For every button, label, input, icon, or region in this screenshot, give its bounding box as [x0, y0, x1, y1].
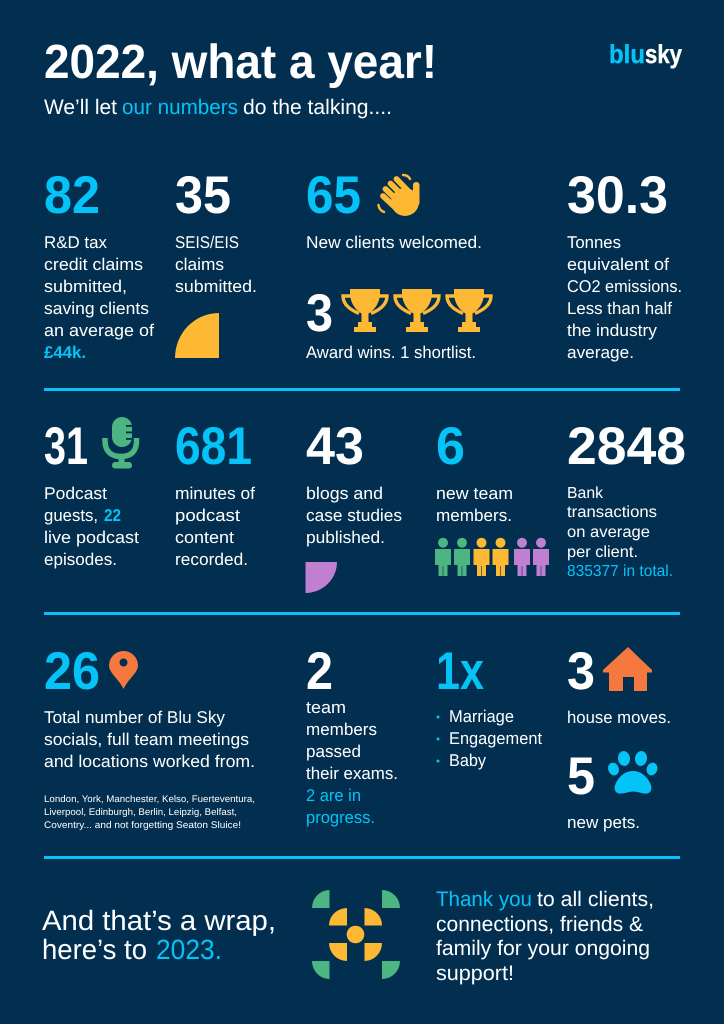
panel: socials and locations: Total number of Blu Sky: [44, 708, 226, 727]
panel: exams: 2: [306, 642, 333, 701]
panel: blogs and case studies: [306, 417, 402, 593]
panel: socials and locations: and locations worked from.: [44, 752, 255, 771]
subtitle: We’ll let: [44, 96, 117, 119]
panel: socials and locations: 26: [44, 642, 100, 701]
panel: exams: [306, 642, 398, 827]
panel: R&D tax credit claims: credit claims: [44, 255, 143, 274]
panel: socials and locations: London, York, Manchester, Kelso, Fuerteventura,: [44, 794, 255, 805]
panel: bank transactions: 835377 in total.: [567, 563, 673, 580]
panel: life events: Marriage: [449, 707, 514, 726]
icon: three trophies: [343, 289, 491, 332]
panel: award wins: Award wins. 1 shortlist.: [306, 343, 476, 362]
panel: R&D tax credit claims: R&D tax: [44, 233, 107, 252]
panel: new pets: 5: [567, 747, 595, 806]
panel: bank transactions: per client.: [567, 544, 638, 561]
panel: R&D tax credit claims: an average of: [44, 321, 154, 340]
thank you message: support!: [436, 962, 514, 985]
icon: paw print: [606, 750, 659, 794]
panel: new team members: 6: [436, 417, 465, 476]
closing message: [42, 905, 276, 965]
panel: socials and locations: [44, 642, 255, 831]
panel: podcast minutes: 681: [175, 417, 252, 476]
subtitle: our numbers: [122, 96, 238, 119]
panel: podcast minutes: minutes of: [175, 484, 255, 503]
title: 2022, what a year!: [44, 36, 437, 89]
icon: six team members: [435, 538, 549, 576]
panel: new clients: [306, 166, 482, 252]
icon: blu sky emblem: [312, 890, 400, 979]
panel: life events: Baby: [449, 751, 486, 770]
panel: bank transactions: on average: [567, 524, 650, 541]
panel: R&D tax credit claims: saving clients: [44, 299, 149, 318]
closing message: 2023.: [156, 934, 222, 965]
subtitle: [44, 96, 392, 119]
panel: life events: [436, 642, 542, 770]
panel: CO2 emissions: CO2 emissions.: [567, 277, 682, 296]
panel: podcast guests: guests,: [44, 506, 98, 525]
thank you message: connections, friends &: [436, 913, 643, 936]
panel: socials and locations: socials, full team meetings: [44, 730, 249, 749]
thank you message: [436, 888, 654, 985]
panel: SEIS/EIS claims: SEIS/EIS: [175, 233, 239, 252]
panel: exams: progress.: [306, 808, 375, 827]
thank you message: to all clients,: [537, 888, 654, 911]
panel: house moves: house moves.: [567, 708, 671, 727]
panel: bank transactions: [567, 417, 686, 580]
panel: R&D tax credit claims: 82: [44, 166, 100, 225]
subtitle: do the talking....: [243, 96, 392, 119]
panel: podcast guests: [44, 417, 139, 569]
panel: CO2 emissions: Tonnes: [567, 233, 621, 252]
icon: house: [603, 647, 652, 691]
panel: exams: 2 are in: [306, 786, 361, 805]
panel: SEIS/EIS claims: 35: [175, 166, 231, 225]
panel: podcast minutes: podcast: [175, 506, 240, 525]
panel: new team members: new team: [436, 484, 513, 503]
panel: CO2 emissions: [567, 166, 682, 362]
logo: blusky: [609, 39, 682, 69]
thank you message: family for your ongoing: [436, 937, 650, 960]
panel: SEIS/EIS claims: [175, 166, 257, 358]
panel: new team members: [436, 417, 513, 525]
panel: new team members: members.: [436, 506, 512, 525]
panel: podcast guests: 31: [44, 417, 88, 476]
closing message: here’s to: [42, 934, 147, 965]
panel: R&D tax credit claims: [44, 166, 154, 362]
panel: SEIS/EIS claims: claims: [175, 255, 224, 274]
panel: R&D tax credit claims: £44k.: [44, 343, 86, 362]
panel: blogs and case studies: published.: [306, 528, 385, 547]
panel: new clients: 65: [306, 166, 361, 225]
panel: podcast guests: live podcast: [44, 528, 139, 547]
panel: bank transactions: 2848: [567, 417, 686, 476]
panel: CO2 emissions: Less than half: [567, 299, 672, 318]
panel: bank transactions: Bank: [567, 485, 604, 502]
panel: award wins: 3: [306, 284, 333, 343]
thank you message: Thank you: [436, 888, 532, 911]
panel: podcast minutes: recorded.: [175, 550, 248, 569]
panel: exams: their exams.: [306, 764, 398, 783]
panel: exams: team: [306, 698, 346, 717]
panel: award wins: [306, 284, 476, 362]
panel: new pets: [567, 747, 640, 832]
panel: blogs and case studies: 43: [306, 417, 364, 476]
panel: CO2 emissions: 30.3: [567, 166, 668, 225]
panel: exams: members: [306, 720, 377, 739]
panel: socials and locations: Liverpool, Edinburgh, Berlin, Leipzig, Belfast,: [44, 807, 237, 818]
panel: life events: Engagement: [449, 729, 542, 748]
panel: R&D tax credit claims: submitted,: [44, 277, 127, 296]
panel: house moves: 3: [567, 642, 595, 701]
panel: SEIS/EIS claims: submitted.: [175, 277, 257, 296]
panel: bank transactions: transactions: [567, 504, 657, 521]
closing message: And that’s a wrap,: [42, 905, 276, 936]
panel: CO2 emissions: average.: [567, 343, 634, 362]
panel: blogs and case studies: blogs and: [306, 484, 383, 503]
panel: exams: passed: [306, 742, 361, 761]
panel: CO2 emissions: equivalent of: [567, 255, 669, 274]
panel: blogs and case studies: case studies: [306, 506, 402, 525]
panel: podcast minutes: [175, 417, 255, 569]
logo: blusky: blu: [609, 39, 645, 69]
panel: new pets: new pets.: [567, 813, 640, 832]
logo: blusky: sky: [645, 39, 682, 69]
panel: podcast guests: 22: [104, 506, 121, 525]
icon: waving hand: [378, 175, 420, 216]
panel: podcast guests: episodes.: [44, 550, 117, 569]
panel: life events: 1x: [436, 642, 484, 701]
icon: location pin: [109, 651, 138, 689]
panel: socials and locations: Coventry... and not forgetting Seaton Sluice!: [44, 820, 241, 831]
icon: microphone: [105, 417, 136, 468]
panel: new clients: New clients welcomed.: [306, 233, 482, 252]
panel: podcast minutes: content: [175, 528, 234, 547]
panel: podcast guests: Podcast: [44, 484, 107, 503]
panel: house moves: [567, 642, 671, 727]
panel: CO2 emissions: the industry: [567, 321, 658, 340]
